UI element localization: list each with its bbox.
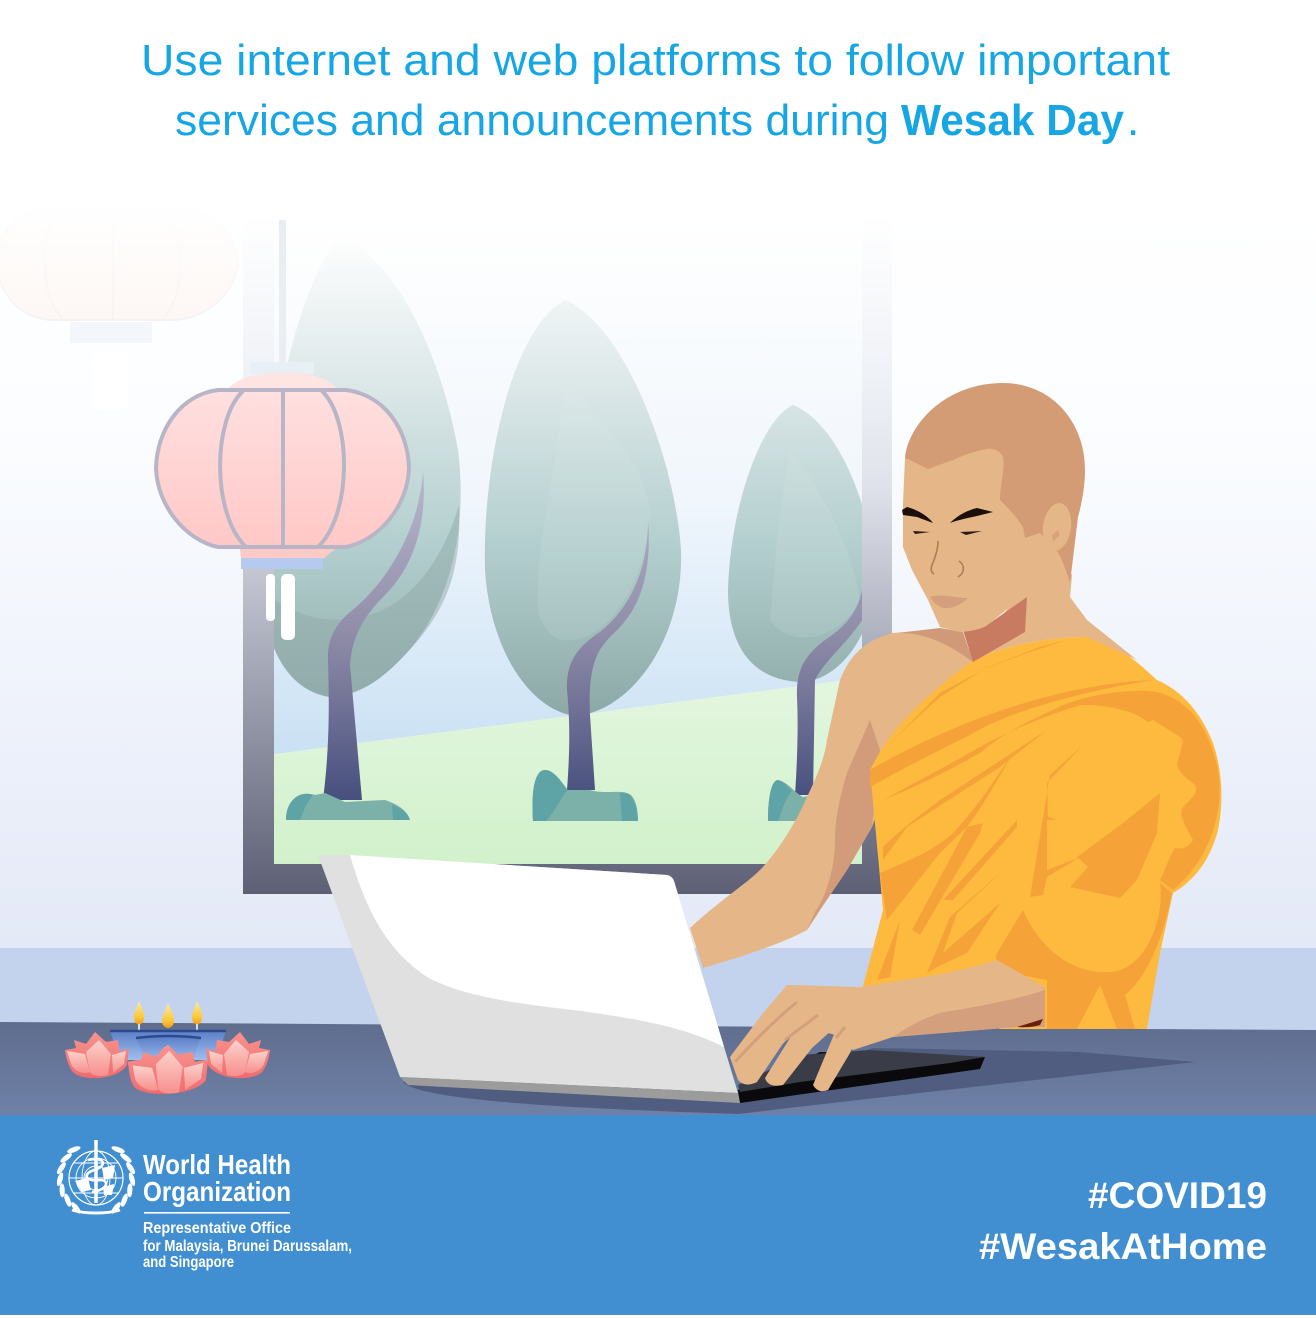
organisation name: Representative Office: [143, 1220, 291, 1237]
hashtags: #WesakAtHome: [979, 1226, 1267, 1267]
room wall: [0, 190, 1316, 950]
closed eyes: [913, 531, 982, 535]
laptop edge: [400, 1077, 740, 1103]
nose: [931, 541, 963, 577]
organisation name: and Singapore: [143, 1254, 234, 1271]
monk: [690, 383, 1221, 1091]
WHO emblem: [55, 1140, 137, 1215]
lips: [930, 595, 968, 608]
laptop keyboard base: [738, 1052, 985, 1103]
shoulder collar shadow: [897, 628, 973, 662]
laptop: [318, 855, 985, 1103]
window view: grass: [274, 678, 862, 864]
fingers: [730, 1013, 856, 1091]
window frame: [243, 215, 892, 894]
table: [0, 1022, 1316, 1115]
footer band: [0, 1115, 1316, 1315]
lotus right: [206, 1032, 270, 1078]
robe folds: [870, 680, 1153, 787]
left arm shadow: [807, 720, 880, 930]
forearm shadow: [893, 990, 1045, 1037]
lotus left: [65, 1032, 129, 1078]
faint distant lantern: [0, 205, 238, 410]
laurel wreath: [55, 1145, 137, 1215]
organisation name: for Malaysia, Brunei Darussalam,: [143, 1238, 352, 1255]
title: Use internet and web platforms to follow important: [141, 36, 1170, 85]
hashtags: #COVID19: [1088, 1175, 1267, 1216]
window view: sky: [274, 215, 862, 865]
organisation name: [143, 1149, 352, 1271]
right arm and hand: [730, 960, 1045, 1091]
ear: [1040, 501, 1074, 553]
trees: [274, 280, 862, 821]
eyebrows: [902, 507, 993, 523]
robe shoulder shading: [1053, 691, 1220, 890]
laptop shadow on table: [403, 1048, 1195, 1114]
hair: [905, 383, 1085, 583]
organisation name: World Health: [143, 1149, 291, 1180]
WHO logo: [55, 1140, 352, 1271]
left arm behind laptop: [690, 630, 985, 968]
neck: [973, 540, 1137, 660]
robe: [862, 637, 1221, 1029]
neck shadow: [963, 597, 1027, 662]
laptop screen back: [318, 855, 738, 1093]
forearm and palm: [763, 960, 1045, 1050]
robe sleeve end: [1017, 1019, 1043, 1027]
lotus centre: [128, 1045, 208, 1094]
tree 3: [728, 405, 875, 821]
floating lotus candles: [65, 1001, 270, 1094]
wall lower stripe: [0, 948, 1316, 1030]
title second line: Wesak Day: [901, 96, 1125, 145]
organisation name: Organization: [143, 1176, 291, 1207]
tree 2: [485, 300, 681, 821]
candle cups: [110, 1031, 226, 1062]
hashtags: [979, 1175, 1267, 1267]
finger creases: [735, 1002, 845, 1062]
tree 1: [274, 280, 461, 820]
flames: [134, 1001, 202, 1040]
head: [902, 383, 1085, 632]
window: [243, 215, 892, 894]
title second line: .: [1127, 96, 1139, 145]
title second line: services and announcements during: [175, 96, 889, 145]
hanging lantern: [156, 220, 409, 640]
